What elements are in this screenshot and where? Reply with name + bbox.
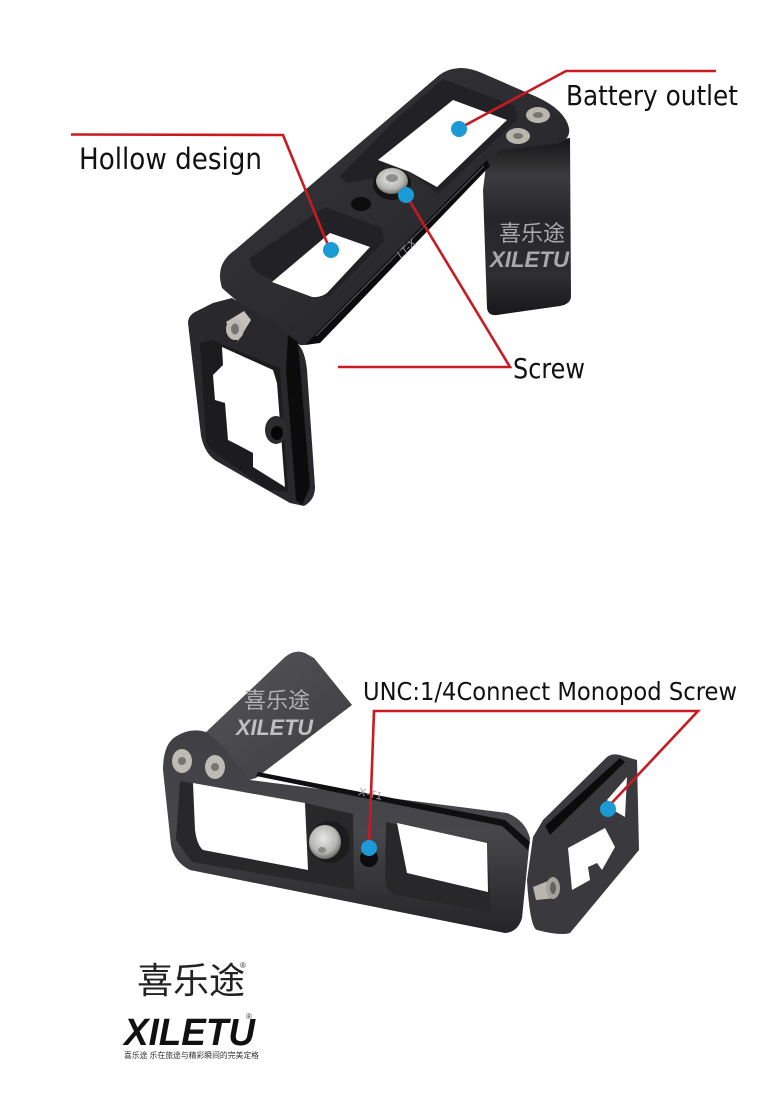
callout: battery outlet (451, 71, 738, 137)
engraved model mark: X-T1 (357, 786, 383, 803)
callout: monopod screw (361, 677, 737, 856)
main plate (163, 730, 530, 933)
side plate bolt (226, 311, 251, 341)
grip (203, 652, 352, 782)
engraved model mark: LT-X (395, 237, 419, 261)
grip (483, 138, 571, 315)
brand logo: 喜乐途 (137, 960, 245, 1001)
left window recess (176, 781, 354, 890)
watermark: 喜乐途 (244, 688, 310, 713)
photo: top bracket (188, 68, 571, 506)
tripod hole (360, 849, 378, 867)
callout: hollow design (71, 134, 339, 258)
watermark: XILETU (234, 715, 314, 740)
callout: hollow design: Hollow design (79, 142, 262, 176)
centre screw (373, 168, 411, 200)
side plate lower window (568, 828, 615, 890)
side plate (188, 298, 315, 506)
lower window (272, 233, 370, 297)
watermark: XILETU (488, 247, 570, 272)
brand logo: ® (240, 961, 246, 970)
upper window recess (340, 79, 517, 194)
callout: screw: Screw (513, 352, 585, 385)
right window recess (385, 822, 491, 912)
side plate upper window (607, 777, 627, 817)
side plate hole (265, 416, 287, 444)
watermark (234, 688, 314, 740)
brand logo: 喜乐途 乐在旅途与精彩瞬间的完美定格 (124, 1050, 259, 1060)
grip bolts (506, 107, 550, 144)
side plate (527, 754, 639, 934)
watermark: 喜乐途 (499, 221, 565, 246)
bracket plate (220, 68, 569, 345)
upper window (378, 100, 507, 187)
tripod hole (351, 197, 371, 211)
watermark (488, 221, 570, 272)
side plate bolt (533, 877, 560, 900)
lower window recess (250, 207, 384, 298)
brand logo: ® (246, 1012, 252, 1021)
centre screw (309, 821, 350, 863)
top edge groove (256, 772, 530, 850)
side plate window (213, 347, 285, 487)
callout: battery outlet: Battery outlet (566, 79, 738, 112)
brand logo (122, 960, 259, 1060)
callout: screw (338, 187, 585, 385)
photo: bottom bracket (163, 652, 639, 934)
grip bolts (172, 749, 225, 779)
right window (397, 823, 488, 892)
plate side edge (305, 160, 490, 345)
side plate recess (200, 340, 288, 492)
brand logo: XILETU (122, 1012, 257, 1054)
left window (193, 783, 308, 870)
